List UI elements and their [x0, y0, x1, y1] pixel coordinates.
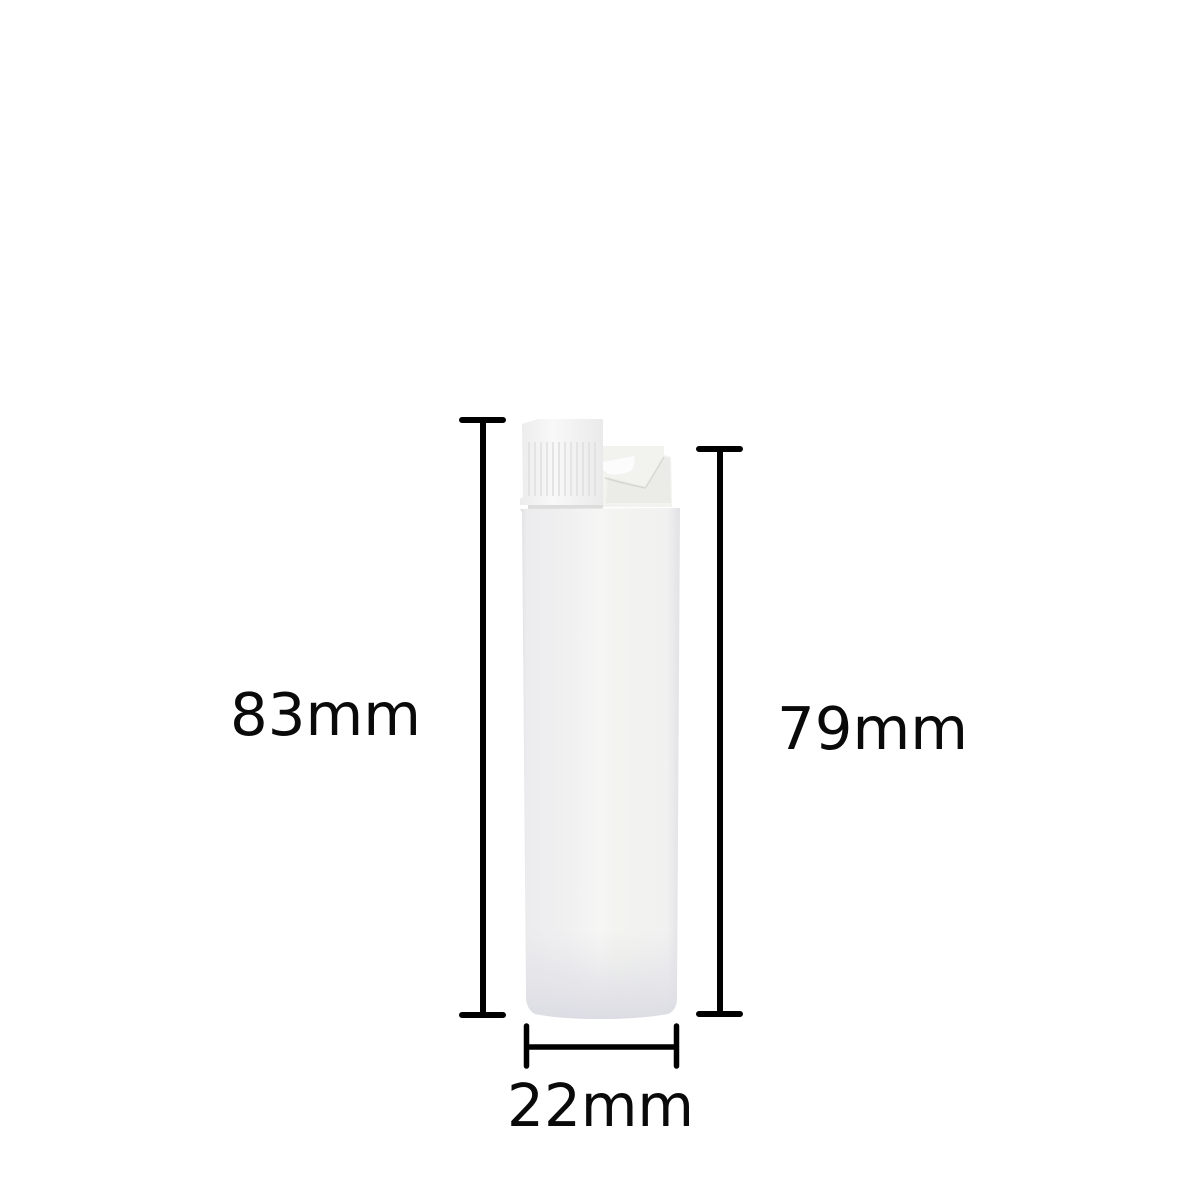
bottle	[520, 419, 680, 1019]
dimension: body height 79mm	[699, 449, 968, 1014]
label: 83mm: 83mm	[230, 680, 421, 749]
label: 22mm: 22mm	[507, 1071, 694, 1140]
flip-top spout	[603, 446, 672, 507]
label: 79mm: 79mm	[777, 694, 968, 763]
dimension: width 22mm	[507, 1026, 694, 1140]
dimension: total height 83mm	[230, 420, 503, 1015]
ribbed cap	[520, 419, 603, 509]
tube body	[520, 508, 680, 1019]
